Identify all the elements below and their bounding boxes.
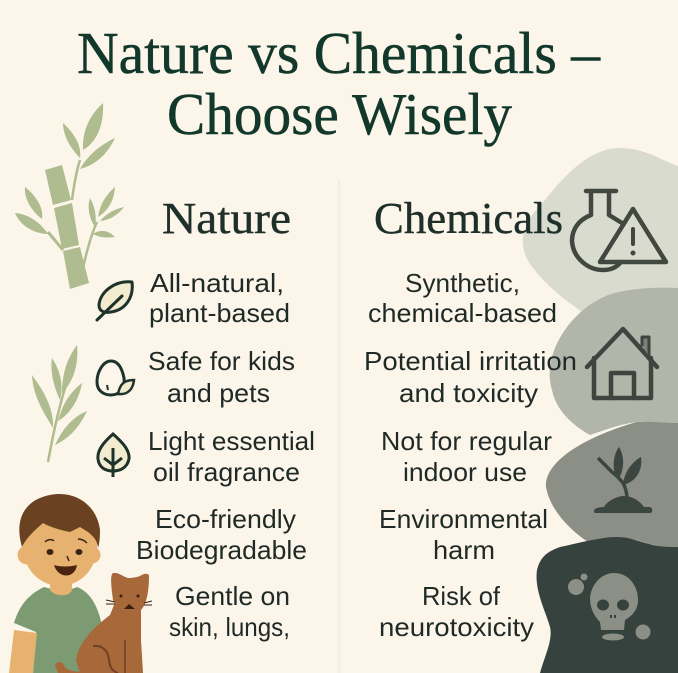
list: chemical risks: harm — [433, 535, 495, 565]
list: nature benefits: Eco-friendly — [155, 504, 296, 534]
list: chemical risks: and toxicity — [399, 378, 538, 408]
list: chemical risks: neurotoxicity — [379, 612, 534, 642]
list: nature benefits: Gentle on — [175, 581, 290, 611]
blob: flask background — [523, 148, 678, 312]
icon: dead plant — [594, 447, 652, 513]
list: chemical risks: indoor use — [403, 457, 527, 487]
list: chemical risks — [364, 268, 577, 642]
list: nature benefits: All-natural, — [150, 268, 284, 298]
list: nature benefits — [136, 268, 315, 642]
list: chemical risks: Environmental — [379, 504, 548, 534]
list: nature benefits: Safe for kids — [148, 346, 295, 376]
list: nature benefits: Biodegradable — [136, 535, 307, 565]
list: nature benefits: Light essential — [148, 426, 315, 456]
list: nature benefits: plant-based — [149, 298, 290, 328]
title: Choose Wisely — [167, 81, 512, 147]
illustration: cat — [55, 573, 152, 673]
heading: Nature: Nature — [162, 194, 291, 243]
title: Nature vs Chemicals – — [77, 20, 600, 86]
icon: leaf — [97, 282, 132, 320]
icon: skull with bubbles — [568, 573, 650, 640]
illustration: boy — [9, 494, 101, 673]
icon: house — [587, 329, 657, 398]
heading: Chemicals: Chemicals — [374, 194, 563, 243]
icon: sprig — [32, 345, 87, 462]
title — [77, 20, 600, 147]
icon: bamboo — [15, 103, 124, 289]
list: nature benefits: and pets — [167, 378, 270, 408]
list: chemical risks: Potential irritation — [364, 346, 577, 376]
icon: leaf in drop — [98, 434, 129, 477]
list: chemical risks: Not for regular — [381, 426, 552, 456]
blob: plant background — [546, 422, 678, 547]
icon: seed and leaf — [97, 361, 134, 395]
icon: flask and warning — [572, 191, 666, 270]
blob: skull background — [537, 537, 678, 673]
blob: house background — [550, 288, 678, 435]
list: nature benefits: oil fragrance — [153, 457, 300, 487]
list: chemical risks: Synthetic, — [405, 268, 520, 298]
list: nature benefits: skin, lungs, — [169, 612, 290, 642]
list: chemical risks: chemical-based — [368, 298, 557, 328]
list: chemical risks: Risk of — [422, 581, 501, 611]
